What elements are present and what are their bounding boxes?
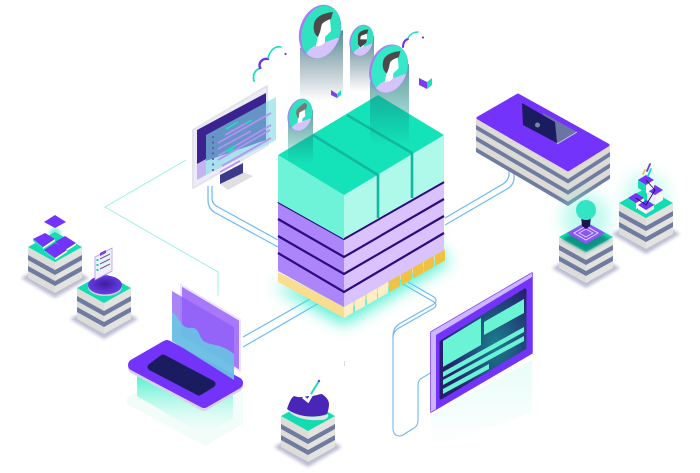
back panel xyxy=(181,285,240,371)
display reflection xyxy=(431,360,532,450)
icon: check mark xyxy=(303,380,320,401)
person capsule: right large xyxy=(369,44,409,136)
icon: cloud left xyxy=(253,47,286,81)
connector: device to central stack xyxy=(243,299,319,347)
icon: laptop xyxy=(522,103,577,144)
monitor stand xyxy=(220,163,243,184)
clipboard stack xyxy=(70,248,138,339)
central server stack xyxy=(272,95,450,325)
teal blocks xyxy=(278,95,444,239)
icon: puzzle pieces xyxy=(33,215,76,260)
icon: cloud right xyxy=(403,32,424,47)
cube network stack xyxy=(612,164,680,254)
person capsule: small left xyxy=(287,98,313,158)
icon: floating cube right xyxy=(419,78,432,89)
connector: teal outline from monitor to laptop xyxy=(105,160,218,296)
icon: floating cube small xyxy=(331,90,341,98)
icon: shield xyxy=(287,394,329,420)
device top xyxy=(134,349,237,405)
code panel xyxy=(206,97,276,175)
icon: leaves xyxy=(643,164,651,176)
connector: laptop table to central stack xyxy=(445,158,514,225)
front panel xyxy=(172,291,234,380)
connector: monitor to central stack xyxy=(208,186,278,247)
icon: disc xyxy=(88,276,122,296)
device base glow xyxy=(127,362,243,446)
icon: network cubes xyxy=(628,175,663,214)
device with keyboard and panels xyxy=(127,285,243,446)
pallet xyxy=(278,249,445,318)
monitor with code xyxy=(193,86,276,190)
shield stack xyxy=(274,380,342,467)
puzzle stack xyxy=(21,215,89,298)
icon: clipboard xyxy=(95,248,112,280)
tablet display xyxy=(431,273,532,450)
icon: chip xyxy=(567,222,605,244)
connector: central stack to display xyxy=(393,282,436,436)
laptop table server xyxy=(476,95,610,206)
person capsule: top left large xyxy=(291,0,351,101)
display content xyxy=(443,299,524,394)
bulb stack xyxy=(552,194,620,288)
purple storage layers xyxy=(278,180,444,307)
icon: light bulb xyxy=(576,200,596,229)
small tick mark xyxy=(344,361,346,366)
table stripes xyxy=(476,118,610,206)
person capsule: middle small xyxy=(349,24,374,89)
